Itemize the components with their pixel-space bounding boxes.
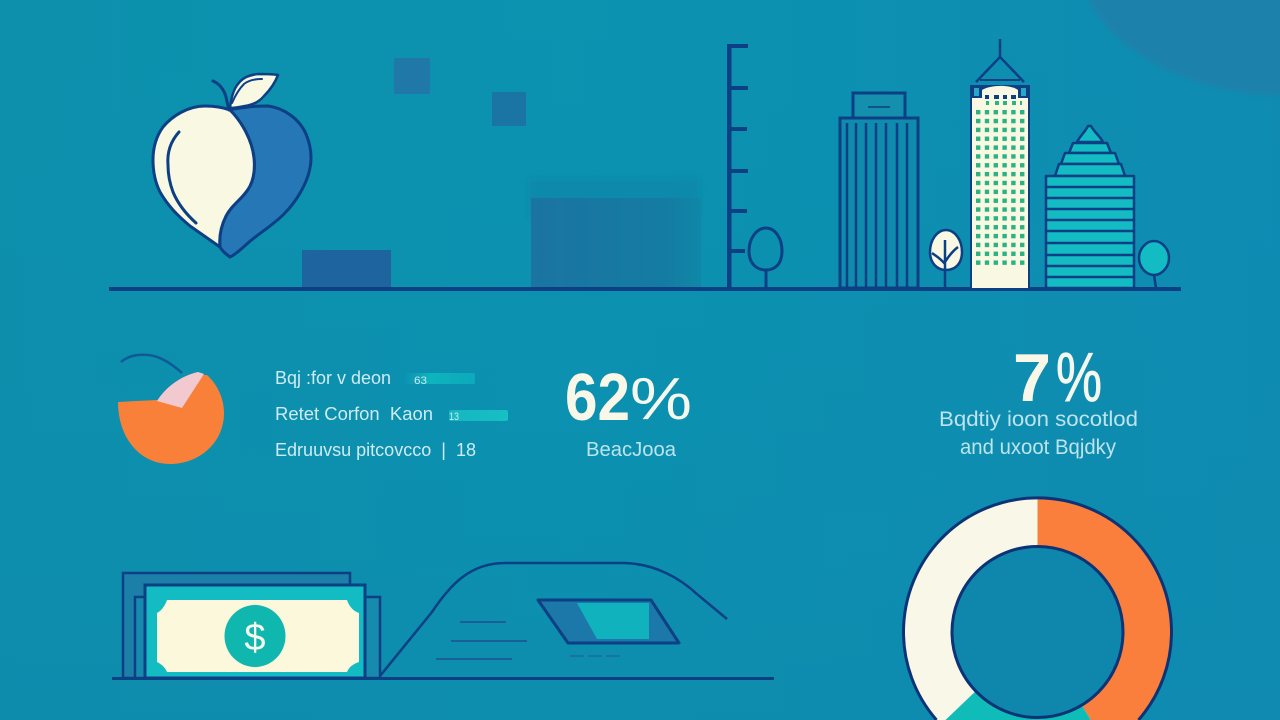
row 3 label: Edruuvsu pitcovcco | 18 [275,439,476,460]
hill curve outline [380,563,727,676]
peach leaf [230,74,278,108]
window grid [976,95,1025,265]
peach highlight [168,132,196,223]
speed lines [436,622,527,659]
bank notes [123,573,380,678]
donut chart [903,498,1172,720]
top ground line [109,287,1181,291]
building: outline tower [840,93,918,288]
dollar medallion: $ [244,617,266,659]
donut outlines [903,498,1172,720]
stat description: Bqdtiy ioon socotlod [939,408,1138,431]
scale ruler [727,44,748,289]
tree right [1139,241,1169,288]
stat: 7%: and uxoot Bqjdky [960,436,1116,459]
leaf vein [232,79,262,103]
screen card [538,600,679,656]
back notes [123,573,350,678]
row 2 bar [449,410,508,423]
icon: peach [153,74,311,257]
row 1 bar [405,373,475,387]
decorative chart blocks [302,58,701,287]
row 2 label: Retet Corfon Kaon [275,403,433,424]
stat: 62%: 62 [565,360,630,435]
peach left half [153,106,254,247]
donut: cream [903,498,1172,720]
bottom ground line [112,677,774,680]
building: white dotted tower [970,39,1030,288]
row 1 bar: 63 [414,375,427,387]
text rows with bars [275,367,508,460]
tree left [749,228,782,288]
row 2 bar: 13 [449,411,459,423]
stat label: BeacJooa [586,439,677,461]
donut: teal [946,632,1091,720]
row 1 label: Bqj :for v deon [275,367,391,388]
stat: 62% [565,360,692,461]
building: teal stepped tower [1046,126,1134,288]
stat: 7% [939,338,1138,459]
front note [145,585,365,678]
peach right half [220,106,311,257]
dollar medallion [224,605,286,667]
stat: 7%: 7 [1013,340,1051,416]
donut: orange [1038,498,1171,720]
stat: 62%: % [630,366,692,432]
tree middle [930,230,962,288]
stat: 7%: % [1056,338,1102,416]
peach stem [213,81,229,110]
icon: orange fruit [118,355,224,464]
